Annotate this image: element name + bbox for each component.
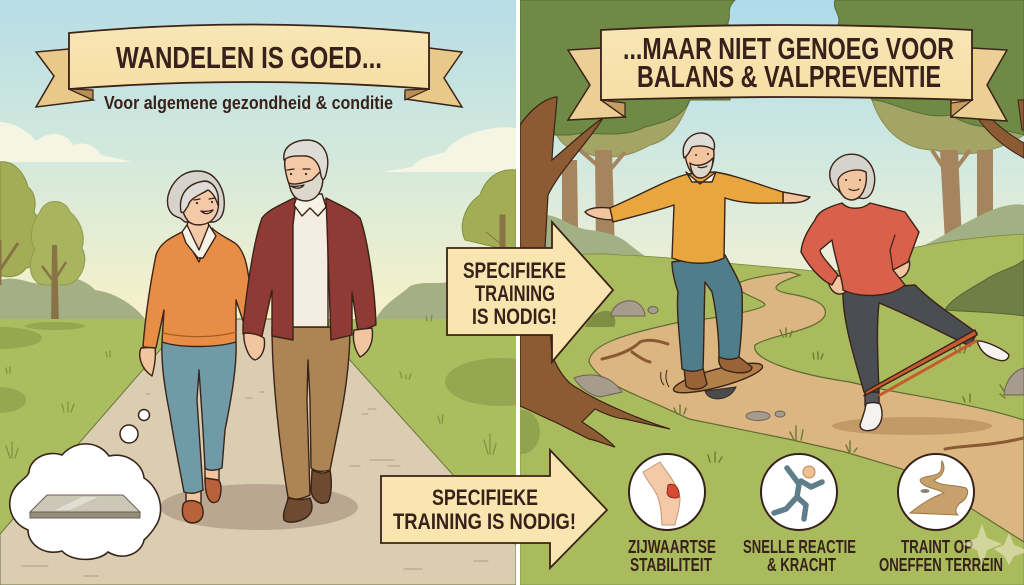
grass tufts on path edges (674, 328, 1005, 462)
icon: quick reaction runner (761, 454, 837, 530)
dark bush (945, 260, 1024, 316)
icon: knee (629, 454, 705, 530)
background trees (556, 100, 1024, 236)
label: sideways stability: ZIJWAARTSE (628, 537, 716, 557)
clouds (0, 122, 516, 172)
label: uneven terrain (879, 537, 1003, 575)
person: man (243, 140, 376, 522)
person: woman (140, 171, 250, 523)
label: uneven terrain: TRAINT OP (901, 537, 973, 557)
panel: walking scene (0, 0, 555, 585)
arrow callout: upper: SPECIFIEKE (463, 258, 566, 283)
sky (0, 0, 516, 320)
fallen branches (602, 340, 1024, 449)
label: sideways stability: STABILITEIT (630, 555, 712, 575)
ground shadow (160, 484, 358, 530)
trees (0, 162, 516, 326)
subtitle: Voor algemene gezondheid & conditie (104, 93, 393, 113)
person: man balancing (585, 133, 810, 389)
label: quick reaction and strength (743, 537, 856, 575)
right tree branch (979, 100, 1024, 158)
grass (0, 319, 516, 544)
walking path (0, 319, 516, 585)
watermark sparkle (962, 524, 1024, 566)
big tree trunk and roots (520, 97, 670, 447)
arrow callout: upper: TRAINING (475, 281, 555, 306)
label: sideways stability (628, 537, 716, 575)
icon: uneven terrain (898, 454, 974, 530)
winding dirt path (589, 272, 1024, 542)
balance board (660, 362, 764, 400)
background bushes (545, 204, 1024, 260)
title: left: WANDELEN IS GOED... (116, 40, 382, 75)
dark grass patch under tree (520, 410, 540, 454)
moss bush (585, 311, 615, 327)
thought bubble: flat walking surface (10, 410, 161, 559)
distant bushes (0, 278, 446, 319)
label: quick reaction and strength: & KRACHT (767, 555, 836, 575)
banner: left heading (36, 24, 462, 107)
rocks (574, 301, 1024, 420)
arrow callout: lower (381, 450, 607, 568)
icon: flat slab (30, 495, 140, 518)
sky (548, 0, 1024, 270)
panel: balance training scene (504, 0, 1024, 585)
divider (516, 0, 520, 585)
path cracks (22, 392, 488, 576)
arrow callout: lower: TRAINING IS NODIG! (393, 509, 576, 534)
grass patches (0, 322, 555, 413)
tree canopies (520, 0, 1024, 135)
banner: right heading (568, 25, 1007, 121)
person: woman with resistance band (801, 154, 1009, 431)
grass (520, 234, 1024, 585)
arrow callout: lower: SPECIFIEKE (432, 485, 538, 510)
person shadow (832, 417, 992, 435)
label: quick reaction and strength: SNELLE REACTIE (743, 537, 856, 557)
arrow callout: upper (447, 222, 613, 362)
grass tufts (6, 315, 496, 458)
arrow callout: upper: IS NODIG! (472, 304, 557, 329)
